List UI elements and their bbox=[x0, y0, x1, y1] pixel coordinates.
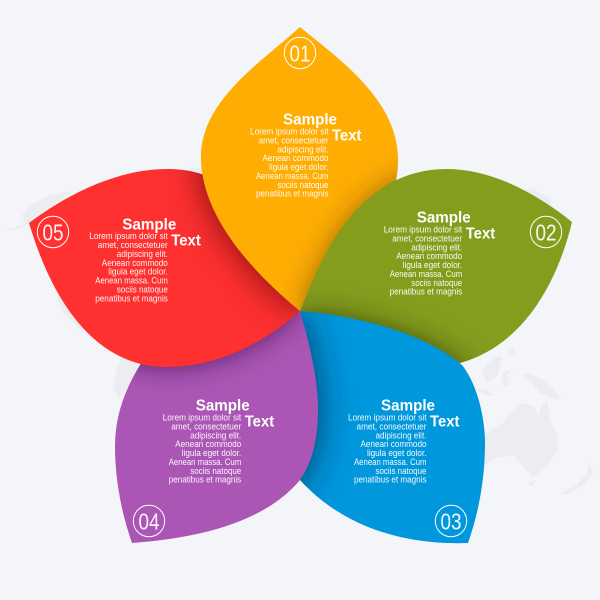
badge 04 bbox=[133, 505, 165, 537]
petal 01 yellow bbox=[201, 27, 398, 311]
badge 02: 02 bbox=[536, 220, 556, 246]
badge 03: 03 bbox=[440, 508, 462, 534]
petal 01 overlap on red bbox=[201, 27, 300, 311]
world map backdrop bbox=[5, 167, 594, 495]
badge 03 bbox=[435, 505, 467, 537]
text: petal 02 bbox=[384, 210, 495, 297]
petal 04 purple bbox=[115, 311, 318, 543]
petal 03 blue bbox=[300, 311, 485, 544]
badge 01: 01 bbox=[290, 40, 310, 66]
petal 02 green bbox=[300, 169, 572, 364]
text: petal 03 bbox=[348, 398, 460, 485]
text: petal 04 bbox=[163, 398, 274, 485]
badge 05 bbox=[37, 216, 69, 248]
badge 02 bbox=[530, 216, 562, 248]
text: petal 01 bbox=[250, 112, 362, 199]
badge 04: 04 bbox=[138, 508, 160, 534]
badge 05: 05 bbox=[42, 220, 64, 246]
badge 01 bbox=[284, 37, 316, 69]
text: petal 05 bbox=[89, 216, 201, 303]
petal 05 red bbox=[29, 169, 300, 367]
